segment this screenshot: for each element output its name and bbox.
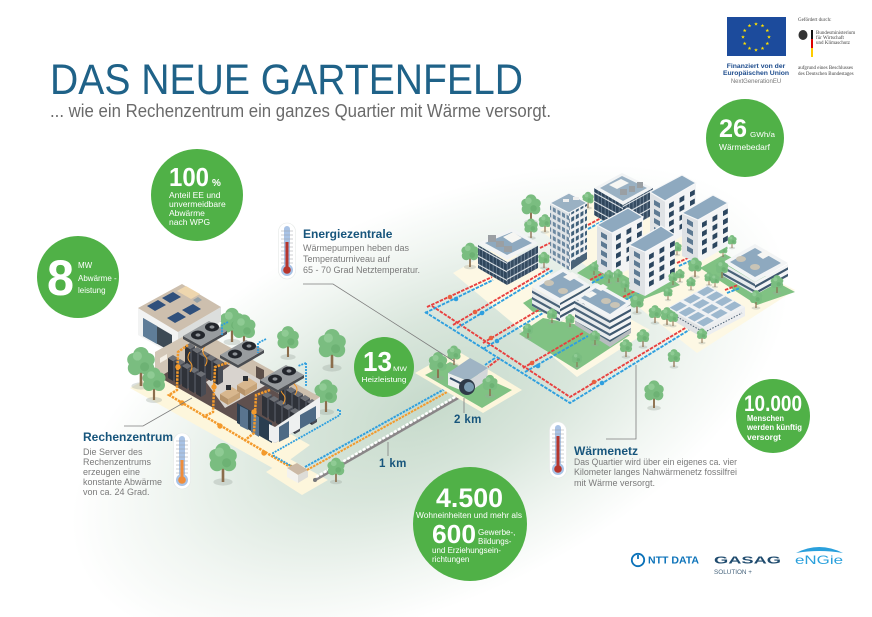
stat: 10.000 people: Menschen xyxy=(747,413,784,423)
stat: 26 GWh/a: 26 xyxy=(719,115,747,143)
low office block front xyxy=(574,283,632,347)
stat: 8 MW: Abwärme - xyxy=(78,274,117,283)
thermometer: Wärmenetz xyxy=(550,422,566,478)
text block: Energiezentrale: Energiezentrale xyxy=(303,227,393,241)
network pipes red xyxy=(427,217,738,397)
text block: Energiezentrale: 65 - 70 Grad Netztemperatur. xyxy=(303,265,420,275)
server racks xyxy=(168,343,317,434)
stat: 4.500 homes and 600 units: Wohneinheiten und mehr als xyxy=(416,511,522,520)
funding logo: BMWK xyxy=(798,18,855,77)
front trees xyxy=(523,252,783,411)
stat: 26 GWh/a xyxy=(706,99,784,177)
stat: 13 MW: MW xyxy=(393,367,407,373)
stat: 100 % xyxy=(151,149,243,241)
logo: GASAG Solution xyxy=(714,554,781,576)
text block: Energiezentrale: Wärmepumpen heben das xyxy=(303,243,410,253)
funding logo: EU: NextGenerationEU xyxy=(731,79,781,85)
hall walls and floor xyxy=(155,325,320,443)
text block: Wärmenetz: Wärmenetz xyxy=(574,444,638,458)
stat: 4.500 homes and 600 units: 600 xyxy=(432,519,476,549)
transport pipes xyxy=(305,386,458,470)
apartment block centre front xyxy=(629,226,675,296)
data centre site xyxy=(127,284,346,495)
stat: 4.500 homes and 600 units xyxy=(413,467,527,581)
text block: Rechenzentrum: Rechenzentrum xyxy=(83,430,173,444)
stat: 100 %: unvermeidbare xyxy=(169,199,226,209)
stat: 100 %: Anteil EE und xyxy=(169,190,221,200)
label: 1 km: 1 km xyxy=(379,458,407,470)
stat: 13 MW: Heizleistung xyxy=(362,375,406,384)
funding logo: BMWK: aufgrund eines Beschlusses xyxy=(798,66,853,71)
logo: GASAG Solution: GASAG xyxy=(714,554,781,566)
stat: 4.500 homes and 600 units: und Erziehungsein- xyxy=(432,546,501,555)
low office block far right xyxy=(723,244,788,295)
stat: 4.500 homes and 600 units: Bildungs- xyxy=(478,537,512,546)
office building with solar roof xyxy=(138,284,221,358)
stat: 100 %: Abwärme xyxy=(169,208,205,218)
trees in front of data centre xyxy=(142,368,237,486)
stat: 13 MW: 13 xyxy=(363,346,392,377)
high-rise tower xyxy=(550,193,587,270)
glass office building back xyxy=(594,173,653,232)
back trees xyxy=(461,192,737,269)
orange heat pipes xyxy=(169,345,307,470)
trees behind data centre xyxy=(127,308,346,415)
text block: Wärmenetz xyxy=(574,444,737,488)
title: DAS NEUE GARTENFELD xyxy=(50,56,523,104)
funding logo: EU: Finanziert von der xyxy=(727,63,786,70)
funding logo: EU: Europäischen Union xyxy=(723,70,789,77)
logo: GASAG Solution: SOLUTION + xyxy=(714,570,753,576)
solar hall xyxy=(667,285,745,338)
apartment block centre back xyxy=(597,208,643,278)
glass office building left xyxy=(478,228,538,285)
funding logo: BMWK: für Wirtschaft xyxy=(816,36,845,41)
apartment block right xyxy=(682,195,728,263)
transfer station xyxy=(287,463,308,483)
stat: 10.000 people xyxy=(736,379,810,453)
text block: Wärmenetz: Das Quartier wird über ein eigenes ca. vier xyxy=(574,457,737,467)
energy centre xyxy=(415,346,522,413)
label: 2 km: 2 km xyxy=(454,414,482,426)
leader lines xyxy=(124,284,636,456)
subtitle: ... wie ein Rechenzentrum ein ganzes Quartier mit Wärme versorgt. xyxy=(50,101,551,121)
cooling fan units xyxy=(183,321,304,393)
funding logo: BMWK: Gefördert durch: xyxy=(798,18,831,23)
text block: Rechenzentrum: konstante Abwärme xyxy=(83,477,162,487)
logo: NTT DATA: NTT DATA xyxy=(648,554,699,566)
funding logo: BMWK: Bundesministerium xyxy=(816,31,855,36)
stat: 100 %: nach WPG xyxy=(169,217,210,227)
Gartenfeld quarter xyxy=(425,173,795,411)
front wall with windows xyxy=(269,397,320,443)
text block: Rechenzentrum: Die Server des xyxy=(83,447,143,457)
stat: 13 MW xyxy=(354,337,414,397)
stat: 8 MW: MW xyxy=(78,261,93,270)
logo: ENGIE: eNGie xyxy=(795,553,843,567)
funding logo: BMWK: des Deutschen Bundestages xyxy=(798,72,854,77)
stat: 10.000 people: 10.000 xyxy=(744,391,802,416)
low office block left xyxy=(532,268,590,322)
stat: 100 %: 100 xyxy=(169,162,209,192)
stat: 26 GWh/a: GWh/a xyxy=(750,130,776,139)
thermometer: Energiezentrale xyxy=(278,223,296,279)
logo: ENGIE xyxy=(795,547,843,567)
pipe flow markers xyxy=(448,295,604,385)
stat: 8 MW xyxy=(37,236,119,318)
funding logo: BMWK: und Klimaschutz xyxy=(816,41,851,46)
pipe nodes xyxy=(175,364,267,456)
stat: 4.500 homes and 600 units: 4.500 xyxy=(436,483,503,513)
text block: Wärmenetz: Kilometer langes Nahwärmenetz fossilfrei xyxy=(574,467,737,477)
text block: Rechenzentrum: erzeugen eine xyxy=(83,467,140,477)
text block: Energiezentrale: Temperaturniveau auf xyxy=(303,254,391,264)
blue return pipes xyxy=(222,322,340,467)
apartment block back right xyxy=(650,175,696,246)
stat: 4.500 homes and 600 units: Gewerbe-, xyxy=(478,528,515,537)
stat: 10.000 people: werden künftig xyxy=(746,422,802,432)
ground plates xyxy=(130,366,328,495)
funding logo: EU xyxy=(723,17,789,85)
stat: 10.000 people: versorgt xyxy=(747,432,781,442)
district heating ruler 1 km xyxy=(313,393,463,484)
text block: Energiezentrale xyxy=(303,227,420,275)
quarter plates and lawns xyxy=(453,190,795,377)
stat: 8 MW: leistung xyxy=(78,286,106,295)
stat: 8 MW: 8 xyxy=(47,250,74,306)
stat: 4.500 homes and 600 units: richtungen xyxy=(432,555,469,564)
office desks xyxy=(220,376,257,405)
thermometer: Rechenzentrum xyxy=(174,433,190,489)
stat: 26 GWh/a: Wärmebedarf xyxy=(719,142,771,152)
text block: Wärmenetz: mit Wärme versorgt. xyxy=(574,478,655,488)
stat: 100 %: % xyxy=(212,178,221,189)
text block: Rechenzentrum: Rechenzentrums xyxy=(83,457,152,467)
text block: Rechenzentrum: von ca. 24 Grad. xyxy=(83,487,150,497)
text block: Rechenzentrum xyxy=(83,430,173,497)
network pipes blue xyxy=(425,221,740,403)
